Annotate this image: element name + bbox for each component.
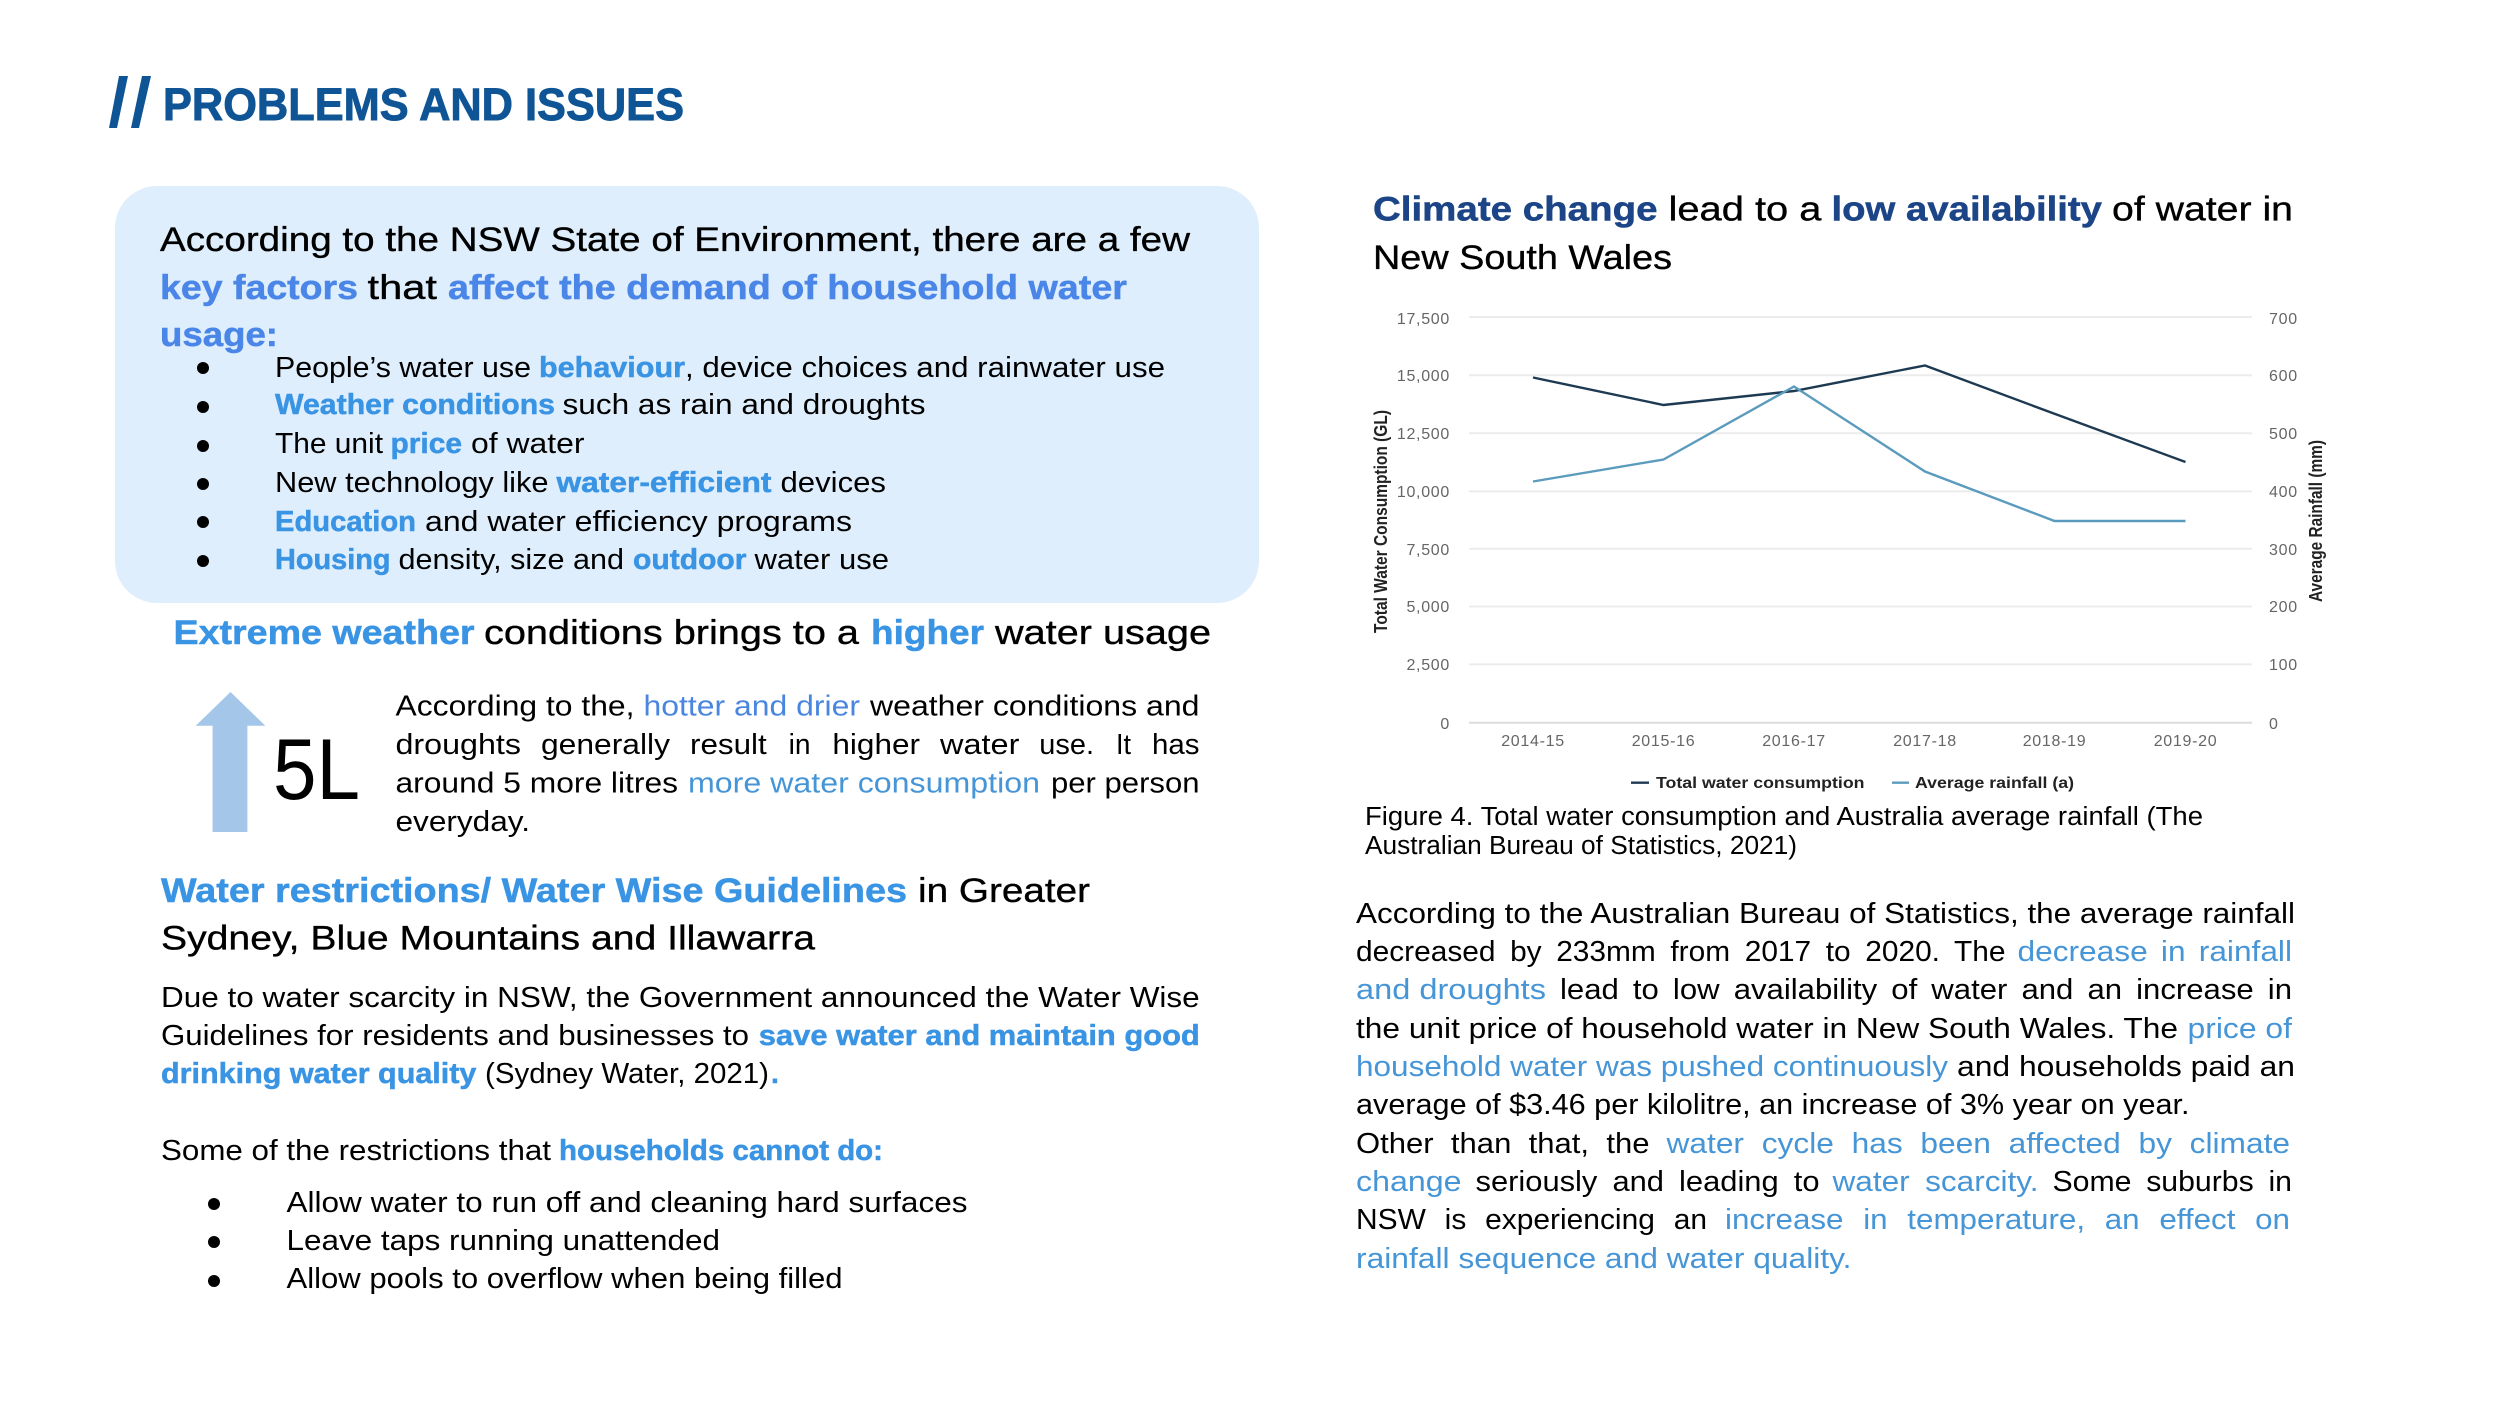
bullet list: restrictions — [208, 1187, 968, 1295]
bullet list: restrictions: Leave taps running unattended — [286, 1225, 720, 1257]
bullet list: factors: People’s water use — [275, 352, 531, 384]
heading: water restrictions: in Greater — [918, 872, 1090, 910]
bullet list: factors — [197, 352, 1165, 576]
text block: rainfall and water price: Other than that, the — [1356, 1128, 1650, 1160]
text: restrictions intro: households cannot do: — [559, 1135, 883, 1167]
line: total water consumption — [1533, 366, 2186, 462]
text block: extreme weather explanation — [396, 690, 1200, 838]
heading: climate change: of water in — [2112, 190, 2293, 228]
text block: rainfall and water price: change — [1356, 1166, 1462, 1198]
legend: Total water consumption — [1656, 775, 1864, 792]
text block: extreme weather explanation: droughts — [396, 729, 521, 761]
text block: rainfall and water price: the unit price of household water in New South Wales. The — [1356, 1013, 2178, 1045]
text block: rainfall and water price: NSW is experiencing an — [1356, 1204, 1707, 1236]
title text: PROBLEMS AND ISSUES — [163, 79, 684, 130]
panel background — [115, 186, 1259, 603]
x axis labels: 2017-18 — [1893, 733, 1957, 750]
text block: rainfall and water price: and households paid an — [1957, 1051, 2295, 1083]
right axis ticks: 200 — [2269, 599, 2298, 616]
figure caption: Figure 4. Total water consumption and Australia average rainfall (The — [1365, 803, 2203, 831]
text block: rainfall and water price: According to the Australian Bureau of Statistics, the average rainfall — [1356, 898, 2295, 930]
text block: extreme weather explanation: generally — [541, 729, 671, 761]
heading: extreme weather: water usage — [994, 614, 1211, 652]
text block: extreme weather explanation: more water consumption — [688, 768, 1040, 800]
left axis ticks: 5,000 — [1406, 599, 1450, 616]
bullet list: factors: New technology like — [275, 467, 548, 499]
x axis labels — [1501, 733, 2217, 750]
bullet list: restrictions: Allow pools to overflow when being filled — [286, 1263, 842, 1295]
panel heading: affect the demand of household water — [448, 269, 1127, 307]
heading: extreme weather: conditions brings to a — [484, 614, 859, 652]
left axis title: Total Water Consumption (GL) — [1371, 410, 1391, 633]
legend: Average rainfall (a) — [1915, 775, 2074, 792]
text block: rainfall and water price: Some suburbs in — [2052, 1166, 2292, 1198]
icon: up arrow — [196, 692, 265, 832]
heading: climate change: lead to a — [1668, 190, 1822, 228]
bullet list: factors: Weather conditions — [275, 389, 555, 421]
bullet list: factors: price — [390, 428, 462, 460]
text block: extreme weather explanation: hotter and drier — [644, 690, 861, 722]
icon: double slash — [109, 76, 151, 128]
figure caption: Australian Bureau of Statistics, 2021) — [1365, 832, 1797, 860]
text block: rainfall and water price: and droughts — [1356, 974, 1546, 1006]
text block: extreme weather explanation: in — [789, 729, 810, 761]
bullet list: factors: Education — [275, 506, 416, 538]
text block: extreme weather explanation: everyday. — [396, 806, 530, 838]
text block: rainfall and water price: increase in temperature, an effect on — [1725, 1204, 2290, 1236]
text block: rainfall and water price: price of — [2188, 1013, 2292, 1045]
bullet list: factors: Housing — [275, 544, 390, 576]
text block: extreme weather explanation: around 5 more litres — [396, 768, 678, 800]
heading: water restrictions — [161, 872, 1090, 958]
heading: extreme weather: Extreme weather — [174, 614, 474, 652]
text block: water wise guidelines: save water and maintain good — [759, 1020, 1200, 1052]
text block: rainfall and water price: rainfall sequence and water quality. — [1356, 1243, 1852, 1275]
line: average rainfall — [1533, 386, 2186, 521]
panel heading: According to the NSW State of Environment, there are a few — [160, 221, 1191, 259]
text block: water wise guidelines — [161, 982, 1200, 1090]
panel: key factors — [115, 186, 1259, 603]
left axis ticks: 12,500 — [1397, 426, 1450, 443]
right axis ticks: 300 — [2269, 542, 2298, 559]
panel heading: usage: — [160, 316, 278, 354]
panel heading — [160, 221, 1191, 354]
right axis ticks: 500 — [2269, 426, 2298, 443]
bullet list: factors: density, size and — [398, 544, 624, 576]
text block: rainfall and water price — [1356, 898, 2295, 1275]
text block: water wise guidelines: . — [771, 1058, 779, 1090]
x axis labels: 2014-15 — [1501, 733, 1565, 750]
text: restrictions intro: Some of the restrictions that — [161, 1135, 551, 1167]
text block: extreme weather explanation: weather conditions and — [869, 690, 1200, 722]
line chart: water consumption and rainfall — [1371, 311, 2326, 792]
right axis ticks — [2269, 311, 2298, 733]
bullet list: factors: such as rain and droughts — [562, 389, 926, 421]
left axis ticks: 15,000 — [1397, 368, 1450, 385]
text block: water wise guidelines: Due to water scarcity in NSW, the Government announced the Water Wise — [161, 982, 1200, 1014]
stat: 5L: 5L — [273, 722, 360, 818]
left axis ticks: 7,500 — [1406, 542, 1450, 559]
bullet list: factors: , device choices and rainwater use — [685, 352, 1165, 384]
text block: extreme weather explanation: It — [1116, 729, 1131, 761]
left axis ticks: 2,500 — [1406, 657, 1450, 674]
bullet list: factors: behaviour — [539, 352, 685, 384]
heading: water restrictions: Sydney, Blue Mountains and Illawarra — [161, 920, 815, 958]
heading: climate change: New South Wales — [1373, 239, 1672, 277]
heading: climate change — [1373, 190, 2293, 277]
heading: extreme weather: higher — [871, 614, 984, 652]
right axis ticks: 600 — [2269, 368, 2298, 385]
left axis ticks — [1397, 311, 1450, 733]
bullet list: factors: and water efficiency programs — [425, 506, 852, 538]
x axis labels: 2015-16 — [1632, 733, 1695, 750]
right axis ticks: 100 — [2269, 657, 2298, 674]
text block: rainfall and water price: seriously and leading to — [1476, 1166, 1820, 1198]
panel heading: that — [368, 269, 438, 307]
bullet list: factors: devices — [780, 467, 886, 499]
x axis labels: 2018-19 — [2023, 733, 2086, 750]
figure caption — [1365, 803, 2203, 860]
right axis ticks: 700 — [2269, 311, 2298, 328]
legend — [1631, 775, 2074, 792]
text block: rainfall and water price: decreased by 233mm from 2017 to 2020. The — [1356, 936, 2006, 968]
title — [109, 76, 684, 130]
text block: water wise guidelines: Guidelines for residents and businesses to — [161, 1020, 749, 1052]
bullet list: factors: water-efficient — [555, 467, 772, 499]
text block: rainfall and water price: household water was pushed continuously — [1356, 1051, 1949, 1083]
right axis ticks: 0 — [2269, 716, 2279, 733]
x axis labels: 2016-17 — [1762, 733, 1826, 750]
text block: rainfall and water price: decrease in rainfall — [2018, 936, 2292, 968]
left axis ticks: 10,000 — [1397, 484, 1450, 501]
right axis title: Average Rainfall (mm) — [2306, 440, 2326, 602]
text block: water wise guidelines: drinking water quality — [161, 1058, 477, 1090]
left axis ticks: 0 — [1440, 716, 1450, 733]
text block: rainfall and water price: average of $3.46 per kilolitre, an increase of 3% year on year. — [1356, 1089, 2190, 1121]
right axis ticks: 400 — [2269, 484, 2298, 501]
text block: extreme weather explanation: has — [1152, 729, 1200, 761]
x axis labels: 2019-20 — [2154, 733, 2217, 750]
text block: rainfall and water price: water cycle has been affected by climate — [1665, 1128, 2290, 1160]
text block: extreme weather explanation: According to the, — [396, 690, 634, 722]
text block: extreme weather explanation: per person — [1051, 768, 1200, 800]
heading: climate change: Climate change — [1373, 190, 1658, 228]
text block: extreme weather explanation: result — [690, 729, 767, 761]
bullet list: factors: outdoor — [633, 544, 746, 576]
heading: water restrictions: Water restrictions/ Water Wise Guidelines — [161, 872, 907, 910]
bullet list: factors: water use — [753, 544, 889, 576]
text block: extreme weather explanation: use. — [1039, 729, 1094, 761]
left axis ticks: 17,500 — [1397, 311, 1450, 328]
bullet list: factors: of water — [471, 428, 585, 460]
bullet list: restrictions: Allow water to run off and cleaning hard surfaces — [286, 1187, 968, 1219]
panel heading: key factors — [160, 269, 358, 307]
text block: extreme weather explanation: higher — [832, 729, 921, 761]
heading: climate change: low availability — [1832, 190, 2102, 228]
bullet list: factors: The unit — [275, 428, 383, 460]
text block: extreme weather explanation: water — [939, 729, 1020, 761]
text block: water wise guidelines: (Sydney Water, 2021) — [485, 1058, 769, 1090]
text block: rainfall and water price: lead to low availability of water and an increase in — [1560, 974, 2292, 1006]
text block: rainfall and water price: water scarcity. — [1831, 1166, 2038, 1198]
